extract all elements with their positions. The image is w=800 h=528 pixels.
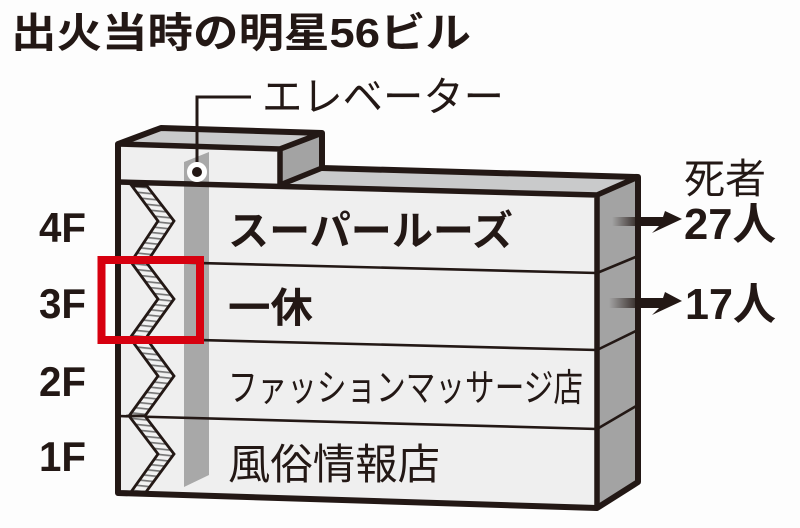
leader line bbox=[197, 97, 251, 165]
arrow: 4F deaths bbox=[612, 211, 682, 233]
building bbox=[118, 128, 638, 508]
deaths: 4F: 27人 bbox=[684, 200, 776, 249]
arrow: 3F deaths bbox=[609, 292, 682, 315]
floor labels: 3F bbox=[39, 280, 86, 327]
elevator label bbox=[190, 74, 504, 180]
title: 出火当時の明星56ビル bbox=[11, 10, 471, 56]
side walls bbox=[280, 133, 638, 508]
tenant: 3F: 一休 bbox=[228, 285, 313, 331]
deaths heading: 死者 bbox=[684, 156, 766, 202]
deaths: 3F: 17人 bbox=[685, 280, 776, 329]
front wall bbox=[118, 144, 597, 508]
roof surfaces bbox=[118, 128, 638, 195]
staircase bbox=[129, 186, 174, 492]
tenant: 2F: ファッションマッサージ店 bbox=[228, 368, 583, 410]
elevator text: エレベーター bbox=[262, 74, 504, 120]
tenant: 4F: スーパールーズ bbox=[228, 208, 513, 254]
tenant: 1F: 風俗情報店 bbox=[228, 441, 440, 488]
floor labels bbox=[39, 204, 86, 480]
floor labels: 2F bbox=[39, 358, 86, 405]
floor labels: 4F bbox=[39, 204, 86, 251]
elevator shaft bbox=[184, 152, 209, 487]
elevator marker bbox=[190, 164, 204, 180]
building outline bbox=[118, 128, 638, 508]
floor labels: 1F bbox=[39, 433, 86, 480]
red highlight box on 3F bbox=[102, 260, 200, 340]
